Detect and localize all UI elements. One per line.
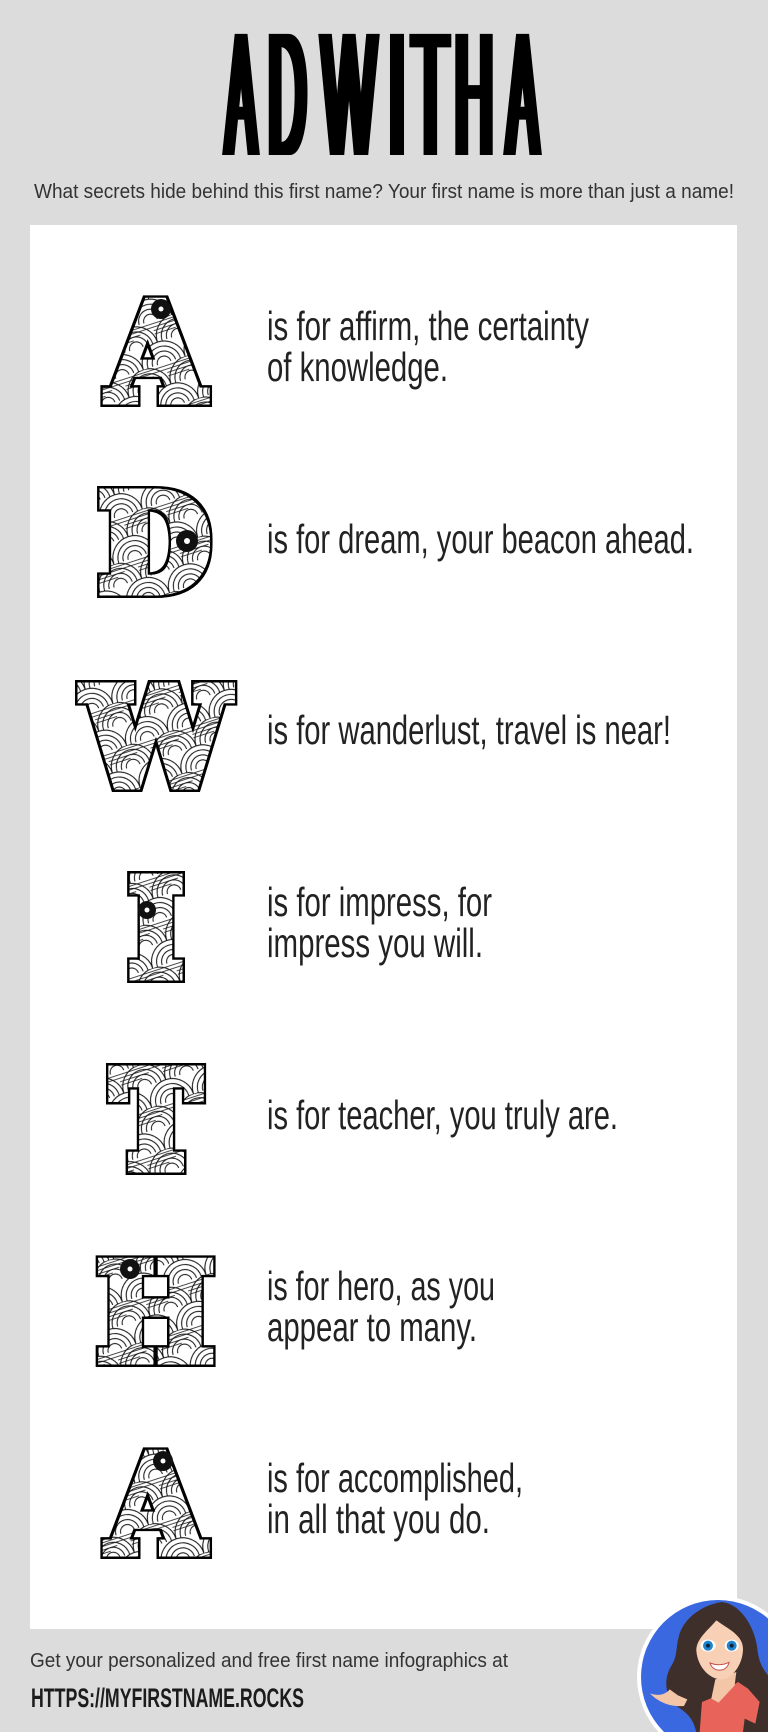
icon: patterned letter I: I <box>130 854 182 1005</box>
text: accomplished: is for accomplished, <box>267 1455 523 1501</box>
title: H <box>455 0 493 193</box>
text: accomplished <box>267 1455 523 1542</box>
text: accomplished: in all that you do. <box>267 1496 490 1542</box>
subtitle: What secrets hide behind this first name? Your first name is more than just a name! <box>34 181 734 203</box>
text: impress: impress you will. <box>267 920 483 966</box>
text: teacher: is for teacher, you truly are. <box>267 1092 618 1138</box>
row: letter W wanderlust <box>83 663 671 814</box>
icon: patterned letter T: T <box>113 1046 199 1197</box>
text: hero <box>267 1263 495 1350</box>
row: letter T teacher <box>113 1046 618 1197</box>
title: I <box>388 0 406 193</box>
footer text: Get your personalized and free first name infographics at <box>30 1650 508 1672</box>
panel: white letter list <box>30 225 737 1629</box>
icon: patterned letter W: W <box>83 663 229 814</box>
avatar: cartoon woman in blue circle <box>637 1596 768 1732</box>
row: letter I impress <box>130 854 492 1005</box>
icon: patterned letter D: D <box>100 469 209 620</box>
text: hero: appear to many. <box>267 1304 477 1350</box>
icon: patterned letter H: H <box>96 1234 214 1392</box>
footer url: HTTPS://MYFIRSTNAME.ROCKS <box>31 1683 304 1713</box>
text: affirm: is for affirm, the certainty <box>267 303 589 349</box>
row: letter A affirm <box>106 274 589 432</box>
title: A <box>226 0 256 193</box>
title: T <box>412 0 449 193</box>
title: W <box>322 0 376 193</box>
text: A <box>507 0 538 193</box>
text: affirm <box>267 303 589 390</box>
row: letter D dream <box>100 469 694 620</box>
icon: patterned letter A: A <box>106 1426 206 1584</box>
text: hero: is for hero, as you <box>267 1263 495 1309</box>
text: impress: is for impress, for <box>267 879 492 925</box>
text: impress <box>267 879 492 966</box>
row: letter H hero <box>96 1234 495 1392</box>
icon: patterned letter A: A <box>106 274 206 432</box>
text: affirm: of knowledge. <box>267 344 448 390</box>
row: letter A accomplished <box>106 1426 523 1584</box>
title: D <box>268 0 306 193</box>
